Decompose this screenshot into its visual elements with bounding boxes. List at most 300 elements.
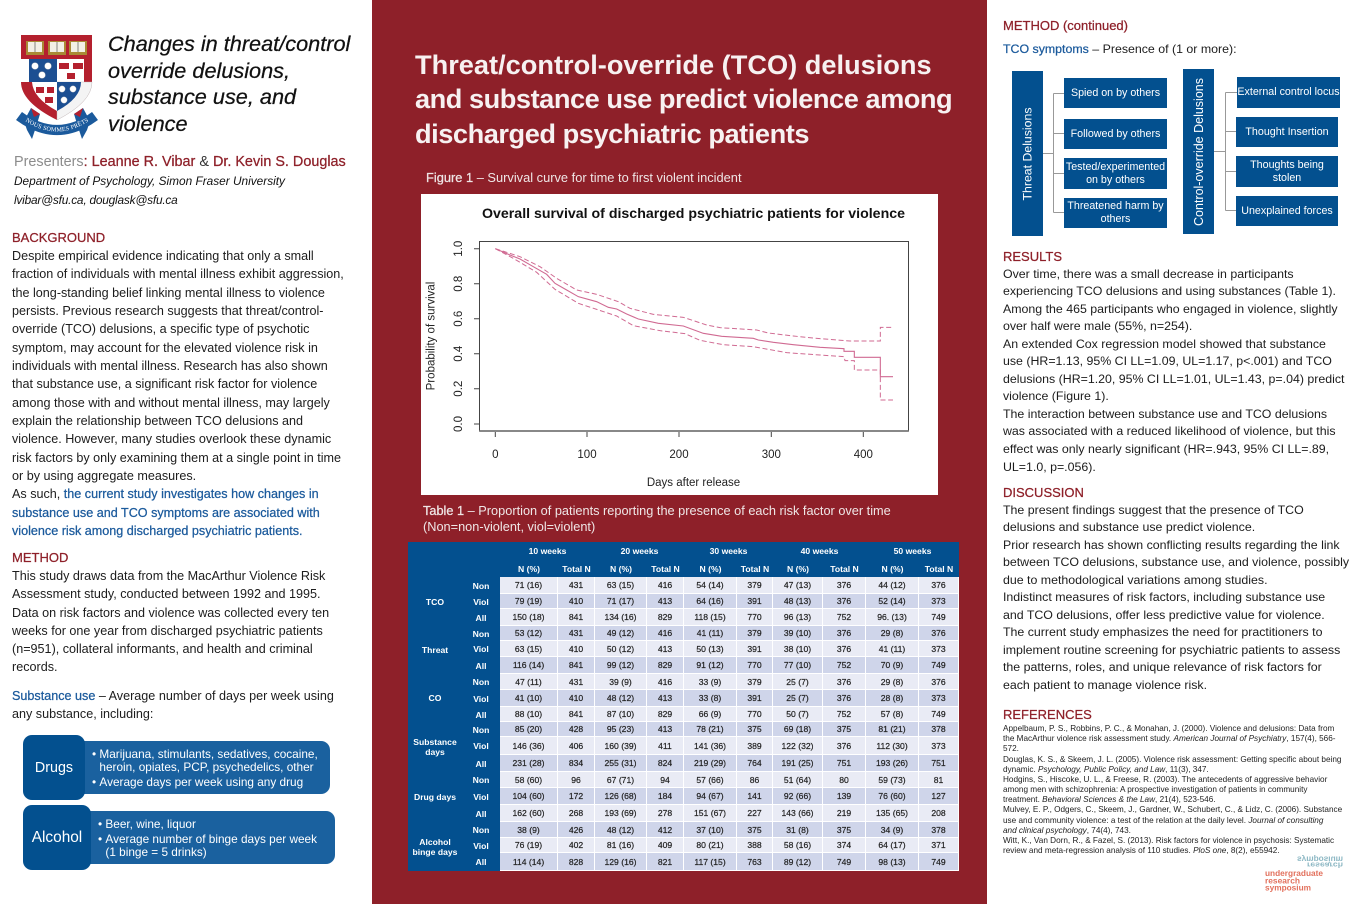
text block: background: among those with and without mental illness, may largely	[12, 396, 330, 410]
table: risk factors over time: 219 (29)	[694, 758, 726, 768]
table: risk factors over time: 413	[658, 693, 672, 703]
table: risk factors over time: 50 weeks	[894, 546, 931, 556]
table: risk factors over time: 77 (10)	[784, 660, 811, 670]
table: risk factors over time: 80 (21)	[696, 840, 724, 850]
table: risk factors over time: 41 (11)	[879, 644, 905, 654]
table: risk factors over time: 127	[931, 791, 946, 801]
text block: references	[1003, 724, 1342, 855]
text block: background: risk factors by only examining them at a single point in time	[12, 451, 341, 465]
x axis tick labels: 400	[854, 449, 873, 461]
control-override item	[1236, 117, 1338, 147]
control-override item: Thoughts being	[1250, 158, 1324, 170]
text block: references: and clinical psychology, 74(4), 743.	[1003, 826, 1131, 835]
table: risk factors over time: Alcohol	[419, 836, 451, 846]
table: risk factors over time: Non	[473, 724, 489, 734]
table: risk factors over time: 67 (71)	[607, 774, 634, 784]
table: risk factors over time: 25 (7)	[786, 676, 809, 686]
table: risk factors over time: 81 (16)	[607, 840, 634, 850]
table: risk factors over time: All	[476, 857, 486, 867]
upper confidence bound	[495, 249, 893, 341]
table: risk factors over time: 829	[658, 660, 672, 670]
table: risk factors over time: 841	[569, 612, 583, 622]
table: risk factors over time: Non	[473, 580, 489, 590]
text block: results: An extended Cox regression model showed that substance	[1003, 337, 1326, 351]
table: risk factors over time: 54 (14)	[696, 580, 724, 590]
table: risk factors over time: 33 (8)	[699, 693, 721, 703]
y axis tick labels: 0.2	[453, 381, 465, 397]
table: risk factors over time: 376	[837, 676, 851, 686]
main heading: and substance use predict violence among	[415, 83, 952, 114]
table: risk factors over time: 38 (9)	[517, 824, 540, 834]
table: risk factors over time: 416	[658, 580, 672, 590]
text block: results	[1003, 266, 1344, 474]
table: risk factors over time: 841	[569, 709, 583, 719]
table: risk factors over time: 150 (18)	[512, 612, 544, 622]
table: risk factors over time: 379	[747, 580, 762, 590]
table: risk factors over time: 749	[931, 709, 946, 719]
text block: results: was associated with a reduced likelihood of violence, but this	[1003, 424, 1336, 438]
table: risk factors over time: 278	[658, 808, 672, 818]
table: risk factors over time: 31 (8)	[786, 824, 809, 834]
table: risk factors over time: 373	[931, 740, 946, 750]
text block: references: use and community violence: a test of the relation at the daily level. Journal of consulting	[1003, 816, 1323, 825]
table: risk factors over time: 193 (69)	[604, 808, 636, 818]
table: risk factors over time: 117 (15)	[694, 856, 726, 866]
text block: references: dynamic. Psychology, Public Policy, and Law, 11(3), 347.	[1003, 765, 1209, 774]
drugs description: • Marijuana, stimulants, sedatives, cocaine,	[92, 746, 318, 760]
table: risk factors over time: 431	[569, 580, 583, 590]
table caption: Table 1 – Proportion of patients reporting the presence of each risk factor over time	[423, 503, 891, 518]
table: risk factors over time: 63 (15)	[607, 580, 634, 590]
table: risk factors over time: N (%)	[882, 564, 903, 574]
table: risk factors over time: 208	[931, 808, 946, 818]
heading: references: REFERENCES	[1003, 707, 1092, 722]
table: risk factors over time: 151 (67)	[694, 808, 726, 818]
text block: discussion: delusions and substance use predict violence.	[1003, 520, 1255, 534]
table: risk factors over time: 66 (9)	[699, 709, 721, 719]
table: risk factors over time: N (%)	[518, 564, 540, 574]
logo: undergraduate research symposium	[1265, 854, 1343, 892]
table: risk factors over time: 431	[569, 628, 583, 638]
table: risk factors over time: 416	[658, 628, 672, 638]
text block: method: Assessment study, conducted between 1992 and 1995.	[12, 587, 321, 601]
presenters: Presenters: Leanne R. Vibar & Dr. Kevin S. Douglas	[14, 154, 346, 170]
table: risk factors over time: 146 (36)	[512, 740, 544, 750]
table: risk factors over time: 829	[658, 709, 672, 719]
table: risk factors over time: 373	[931, 644, 946, 654]
table: risk factors over time: 391	[747, 693, 762, 703]
control-override item: Thought Insertion	[1245, 126, 1329, 138]
table: risk factors over time: 114 (14)	[513, 856, 544, 866]
table: risk factors over time: 191 (25)	[781, 758, 814, 768]
control-override item: External control locus	[1237, 86, 1340, 98]
x axis title: Days after release	[647, 477, 740, 489]
table: risk factors over time: 41 (11)	[697, 628, 723, 638]
table: risk factors over time: 255 (31)	[604, 758, 636, 768]
y axis tick labels: 0.8	[453, 276, 465, 292]
logo: undergraduate research symposium: symposium	[1297, 854, 1343, 864]
control-override box: Control-override Delusions	[1192, 78, 1206, 225]
text block: background: symptom, may account for the elevated violence risk in	[12, 341, 318, 355]
threat item	[1064, 78, 1167, 108]
table: risk factors over time: Viol	[473, 741, 489, 751]
table: risk factors over time: 47 (13)	[784, 580, 811, 590]
logo: undergraduate research symposium: undergraduate	[1265, 868, 1323, 878]
table: risk factors over time: 64 (17)	[878, 840, 906, 850]
table: risk factors over time: 391	[747, 644, 762, 654]
text: TCO symptoms: TCO symptoms – Presence of (1 or more):	[1003, 42, 1237, 56]
threat item: Tested/experimented	[1066, 160, 1165, 172]
table: risk factors over time: 79 (19)	[515, 596, 542, 606]
y axis title: Probability of survival	[426, 282, 438, 390]
table: risk factors over time: Non	[473, 628, 489, 638]
table: risk factors over time: 112 (30)	[876, 740, 908, 750]
table: risk factors over time: 95 (23)	[607, 724, 634, 734]
text block: discussion: The current study emphasizes the need for practitioners to	[1003, 625, 1322, 639]
text block: results: UL=1.0, p=.056).	[1003, 460, 1096, 474]
table: risk factors over time: 406	[569, 740, 583, 750]
table: risk factors over time: 268	[569, 808, 583, 818]
alcohol label: Alcohol	[32, 828, 82, 846]
table: risk factors over time: 39 (9)	[609, 676, 632, 686]
drugs label: Drugs	[35, 760, 73, 776]
x axis tick labels: 300	[762, 449, 781, 461]
logo: undergraduate research symposium: symposium	[1265, 882, 1311, 892]
table: risk factors over time: All	[476, 758, 486, 768]
table: risk factors over time: 94	[660, 774, 670, 784]
text block: background: persists. Previous research suggests that threat/control-	[12, 304, 324, 318]
table: risk factors over time: 70 (9)	[881, 660, 903, 670]
table: risk factors over time: 96	[571, 774, 581, 784]
table: risk factors over time: 416	[658, 676, 672, 686]
x axis tick labels	[492, 449, 873, 461]
table: risk factors over time: 96. (13)	[877, 612, 907, 622]
table: risk factors over time: 33 (9)	[699, 676, 721, 686]
table: risk factors over time: 411	[658, 740, 672, 750]
text block: substance use: Substance use – Average number of days per week using	[12, 689, 334, 703]
table: risk factors over time: 375	[837, 824, 851, 834]
survival curve	[495, 249, 893, 400]
text block: results: use (HR=1.13, 95% CI LL=1.09, UL=1.17, p<.001) and TCO	[1003, 354, 1332, 368]
table: risk factors over time: 134 (16)	[604, 612, 636, 622]
diagram: delusion types	[1012, 69, 1340, 236]
table: risk factors over time: All	[476, 710, 486, 720]
table: risk factors over time: N (%)	[700, 564, 721, 574]
table: risk factors over time: 92 (66)	[784, 791, 811, 801]
table: risk factors over time: 402	[569, 840, 583, 850]
table: risk factors over time: 373	[931, 596, 946, 606]
table: risk factors over time: 378	[931, 724, 946, 734]
table: risk factors over time: 58 (60)	[515, 774, 542, 784]
table: risk factors over time: 824	[658, 758, 672, 768]
title	[108, 31, 351, 136]
text block: results: Among the 465 participants who engaged in violence, slightly	[1003, 302, 1338, 316]
table: risk factors over time: 80	[839, 774, 849, 784]
title: override delusions,	[108, 58, 290, 83]
table: risk factors over time: All	[476, 808, 486, 818]
table: risk factors over time: Total N	[925, 564, 953, 574]
y axis tick labels	[453, 241, 465, 432]
table: risk factors over time: Non	[473, 677, 489, 687]
alcohol description: (1 binge = 5 drinks)	[105, 845, 207, 859]
table: risk factors over time: 160 (39)	[604, 740, 636, 750]
table: risk factors over time: 34 (9)	[881, 824, 903, 834]
text block: discussion: Prior research has shown conflicting results regarding the link	[1003, 538, 1340, 552]
table: risk factors over time: Drug days	[414, 792, 456, 802]
main heading: Threat/control-override (TCO) delusions	[415, 48, 932, 80]
table: risk factors over time: 89 (12)	[784, 856, 811, 866]
text block: references: among men with schizophrenia: A prospective investigation of patients in community	[1003, 785, 1307, 794]
table: risk factors over time: 71 (17)	[607, 596, 634, 606]
text block: method: (n=951), collateral informants, and health and criminal	[12, 642, 313, 656]
heading: method: METHOD	[12, 550, 68, 565]
threat item	[1064, 119, 1167, 149]
text block: background: As such, the current study investigates how changes in	[12, 487, 319, 501]
table: risk factors over time: 431	[569, 676, 583, 686]
table: risk factors over time: 85 (20)	[515, 724, 542, 734]
table: risk factors over time: 379	[747, 676, 762, 686]
table: risk factors over time: 391	[747, 596, 762, 606]
control-override item: Unexplained forces	[1241, 204, 1333, 216]
table: risk factors over time: 371	[931, 840, 946, 850]
affiliation: Department of Psychology, Simon Fraser University	[14, 174, 285, 188]
table: risk factors over time: 51 (64)	[784, 774, 811, 784]
table: risk factors over time: 749	[931, 660, 946, 670]
table: risk factors over time: 69 (18)	[784, 724, 811, 734]
table: risk factors over time: 770	[747, 709, 762, 719]
control-override item: stolen	[1273, 172, 1301, 184]
title: substance use, and	[108, 84, 296, 109]
table: risk factors over time: 64 (16)	[696, 596, 724, 606]
alcohol description: • Average number of binge days per week	[98, 832, 317, 846]
table: risk factors over time: 141	[747, 791, 762, 801]
table: risk factors over time: 104 (60)	[512, 791, 544, 801]
table: risk factors over time: 219	[837, 808, 851, 818]
table: risk factors over time: 91 (12)	[696, 660, 724, 670]
text block: background: Despite empirical evidence indicating that only a small	[12, 249, 314, 263]
table: risk factors over time: 410	[569, 644, 583, 654]
text block: background: or by using aggregate measures.	[12, 469, 196, 483]
title: violence	[108, 111, 188, 136]
table: risk factors over time: Viol	[473, 644, 489, 654]
table: risk factors over time: 379	[747, 628, 762, 638]
text block: method: records.	[12, 660, 58, 674]
table: risk factors over time: TCO	[426, 596, 444, 606]
text block: results: delusions (HR=1.20, 95% CI LL=1.01, UL=1.43, p=.04) predict	[1003, 372, 1344, 386]
alcohol description: • Beer, wine, liquor	[98, 816, 196, 830]
table: risk factors over time: 139	[837, 791, 851, 801]
table: risk factors over time: Non	[473, 775, 489, 785]
table: risk factors over time: 409	[658, 840, 672, 850]
table: risk factors over time: 63 (15)	[515, 644, 542, 654]
text block: results: over half were male (55%, n=254).	[1003, 319, 1192, 333]
table: risk factors over time: 126 (68)	[604, 791, 636, 801]
table: risk factors over time: 410	[569, 693, 583, 703]
table: risk factors over time: 57 (8)	[881, 709, 903, 719]
text block: results: effect was only nearly significant (HR=.943, 95% CI LL=.89,	[1003, 442, 1329, 456]
y axis tick labels: 0.0	[453, 416, 465, 432]
table: risk factors over time: 841	[569, 660, 583, 670]
table: risk factors over time: 141 (36)	[694, 740, 726, 750]
table: risk factors over time: 37 (10)	[696, 824, 724, 834]
plot frame and axes	[474, 242, 908, 437]
text block: references: review and meta-regression analysis of 110 studies. PloS one, 8(2), e55942.	[1003, 846, 1280, 855]
table: risk factors over time: 413	[658, 724, 672, 734]
text block: discussion: implement routine screening for psychiatric patients to assess	[1003, 642, 1340, 656]
table: risk factors over time: 122 (32)	[781, 740, 814, 750]
table: risk factors over time: Total N	[741, 564, 769, 574]
text block: discussion: The present findings suggest that the presence of TCO	[1003, 502, 1304, 516]
table: risk factors over time: 53 (12)	[515, 628, 542, 638]
heading: results: RESULTS	[1003, 249, 1062, 264]
table: risk factors over time: Total N	[562, 564, 591, 574]
table: risk factors over time: N (%)	[610, 564, 632, 574]
table: risk factors over time: binge days	[413, 846, 457, 856]
table: risk factors over time: 184	[658, 791, 672, 801]
table: risk factors over time: Viol	[473, 694, 489, 704]
drugs description	[82, 741, 330, 794]
threat item	[1064, 158, 1167, 189]
alcohol label	[23, 805, 91, 870]
text block: background: fraction of individuals with mental illness exhibit aggression,	[12, 267, 344, 281]
text block: background: individuals with mental illness. Research has also shown	[12, 359, 328, 373]
table: risk factors over time: 376	[931, 580, 946, 590]
table: risk factors over time: 378	[931, 824, 946, 834]
heading: method continued: METHOD (continued)	[1003, 18, 1128, 33]
table: risk factors over time: 86	[750, 774, 759, 784]
threat item: Followed by others	[1071, 128, 1160, 140]
table: risk factors over time: 749	[931, 856, 946, 866]
logo: undergraduate research symposium: research	[1265, 876, 1300, 886]
threat item: on by others	[1086, 174, 1145, 186]
drugs description: • Average days per week using any drug	[92, 774, 303, 788]
drugs description: heroin, opiates, PCP, psychedelics, other	[99, 760, 314, 774]
survival chart	[421, 194, 938, 495]
text block: method: Data on risk factors and violence was collected every ten	[12, 606, 329, 620]
table: risk factors over time: 118 (15)	[694, 612, 726, 622]
table: risk factors over time: 376	[837, 693, 851, 703]
panel: drugs	[23, 735, 330, 800]
table: risk factors over time: 375	[747, 824, 762, 834]
table: risk factors over time: 376	[837, 628, 851, 638]
text block: background: violence. However, many studies overlook these dynamic	[12, 432, 331, 446]
text block: references: Douglas, K. S., & Skeem, J. L. (2005). Violence risk assessment: Getting specific about being	[1003, 755, 1341, 764]
table: risk factors over time: 57 (66)	[696, 774, 724, 784]
table: risk factors over time: 25 (7)	[786, 693, 809, 703]
text block: discussion: the patterns, roles, and unique relevance of risk factors for	[1003, 660, 1322, 674]
table: risk factors over time: 375	[747, 724, 762, 734]
table: risk factors over time: 20 weeks	[621, 546, 658, 556]
table: risk factors over time: 78 (21)	[696, 724, 724, 734]
table: risk factors over time: 87 (10)	[607, 709, 634, 719]
table: risk factors over time: 751	[931, 758, 946, 768]
text block: background: violence risk among discharged psychiatric patients.	[12, 524, 302, 538]
affiliation	[14, 174, 286, 207]
table: risk factors over time: All	[476, 612, 486, 622]
table: risk factors over time: 50 (7)	[786, 709, 809, 719]
table: risk factors over time: 59 (73)	[878, 774, 906, 784]
threat delusions box: Threat Delusions	[1020, 107, 1034, 200]
table: risk factors over time: 81	[934, 774, 943, 784]
x axis tick labels: 100	[577, 449, 597, 461]
lower confidence bound	[495, 249, 893, 400]
threat item	[1064, 198, 1167, 228]
text block: method: This study draws data from the MacArthur Violence Risk	[12, 569, 325, 583]
text block: results: The interaction between substance use and TCO delusions	[1003, 407, 1327, 421]
table: risk factors over time: 413	[658, 644, 672, 654]
table: risk factors over time: 752	[837, 709, 851, 719]
table: risk factors over time: N (%)	[787, 564, 809, 574]
table: risk factors over time: 38 (10)	[784, 644, 811, 654]
table: risk factors over time: 71 (16)	[515, 580, 542, 590]
control-override item	[1236, 156, 1338, 187]
threat delusions box	[1012, 71, 1043, 236]
text block: discussion: and TCO delusions, offer less predictive value for violence.	[1003, 608, 1325, 622]
threat item: others	[1101, 213, 1130, 225]
table: risk factors over time: 48 (13)	[784, 596, 811, 606]
table: risk factors over time: Non	[473, 825, 489, 835]
main heading	[415, 48, 952, 149]
table: risk factors over time: 770	[747, 660, 762, 670]
text block: references: Hodgins, S., Hiscoke, U. L., & Freese, R. (2003). The antecedents of aggressive behavior	[1003, 775, 1327, 784]
y axis tick labels: 1.0	[453, 241, 465, 257]
text block: background: explain the relationship between TCO delusions and	[12, 414, 303, 428]
table: risk factors over time: 376	[837, 596, 851, 606]
table: risk factors over time: 29 (8)	[881, 628, 903, 638]
table: risk factors over time: 426	[569, 824, 583, 834]
table: risk factors over time: 227	[747, 808, 762, 818]
table: risk factors over time: 47 (11)	[515, 676, 542, 686]
table: risk factors over time: 41 (10)	[515, 693, 542, 703]
y axis tick labels: 0.6	[453, 311, 465, 327]
table: risk factors over time: 834	[569, 758, 583, 768]
table: risk factors over time: 413	[658, 596, 672, 606]
table: risk factors over time: 374	[837, 840, 851, 850]
table: risk factors over time: Viol	[473, 792, 489, 802]
table: risk factors over time: 412	[658, 824, 672, 834]
heading: discussion: DISCUSSION	[1003, 485, 1084, 500]
table: risk factors over time: 376	[837, 740, 851, 750]
text block: references: the MacArthur violence risk assessment study. American Journal of Psychiatry, 157(4), 566-	[1003, 734, 1336, 743]
text block: references: 572.	[1003, 744, 1019, 753]
table: risk factors over time: 39 (10)	[784, 628, 811, 638]
table: risk factors over time: 143 (66)	[781, 808, 814, 818]
threat item: Threatened harm by	[1067, 200, 1164, 212]
table: risk factors over time: 48 (12)	[607, 824, 634, 834]
table: risk factors over time: Threat	[422, 645, 448, 655]
heading: background: BACKGROUND	[12, 230, 105, 245]
text block: background: override (TCO) delusions, a specific type of psychotic	[12, 322, 309, 336]
text block: results: violence (Figure 1).	[1003, 389, 1109, 403]
table: risk factors over time: 50 (12)	[607, 644, 634, 654]
table: risk factors over time: 88 (10)	[515, 709, 542, 719]
table: risk factors over time: 76 (19)	[515, 840, 542, 850]
table: risk factors over time: 752	[837, 660, 851, 670]
table caption	[423, 503, 891, 534]
table: risk factors over time: Total N	[651, 564, 680, 574]
table: risk factors over time: 94 (67)	[696, 791, 724, 801]
table: risk factors over time: 752	[837, 612, 851, 622]
text block: discussion: between TCO delusions, substance use, and violence, possibly	[1003, 555, 1349, 569]
table: risk factors over time: 99 (12)	[607, 660, 634, 670]
table: risk factors over time: 828	[569, 856, 583, 866]
connectors	[1043, 92, 1237, 213]
table: risk factors over time: 116 (14)	[513, 660, 544, 670]
table: risk factors over time: 58 (16)	[784, 840, 811, 850]
text block: results: Over time, there was a small decrease in participants	[1003, 266, 1294, 280]
text block: discussion	[1003, 502, 1349, 692]
table: risk factors over time: 751	[837, 758, 851, 768]
